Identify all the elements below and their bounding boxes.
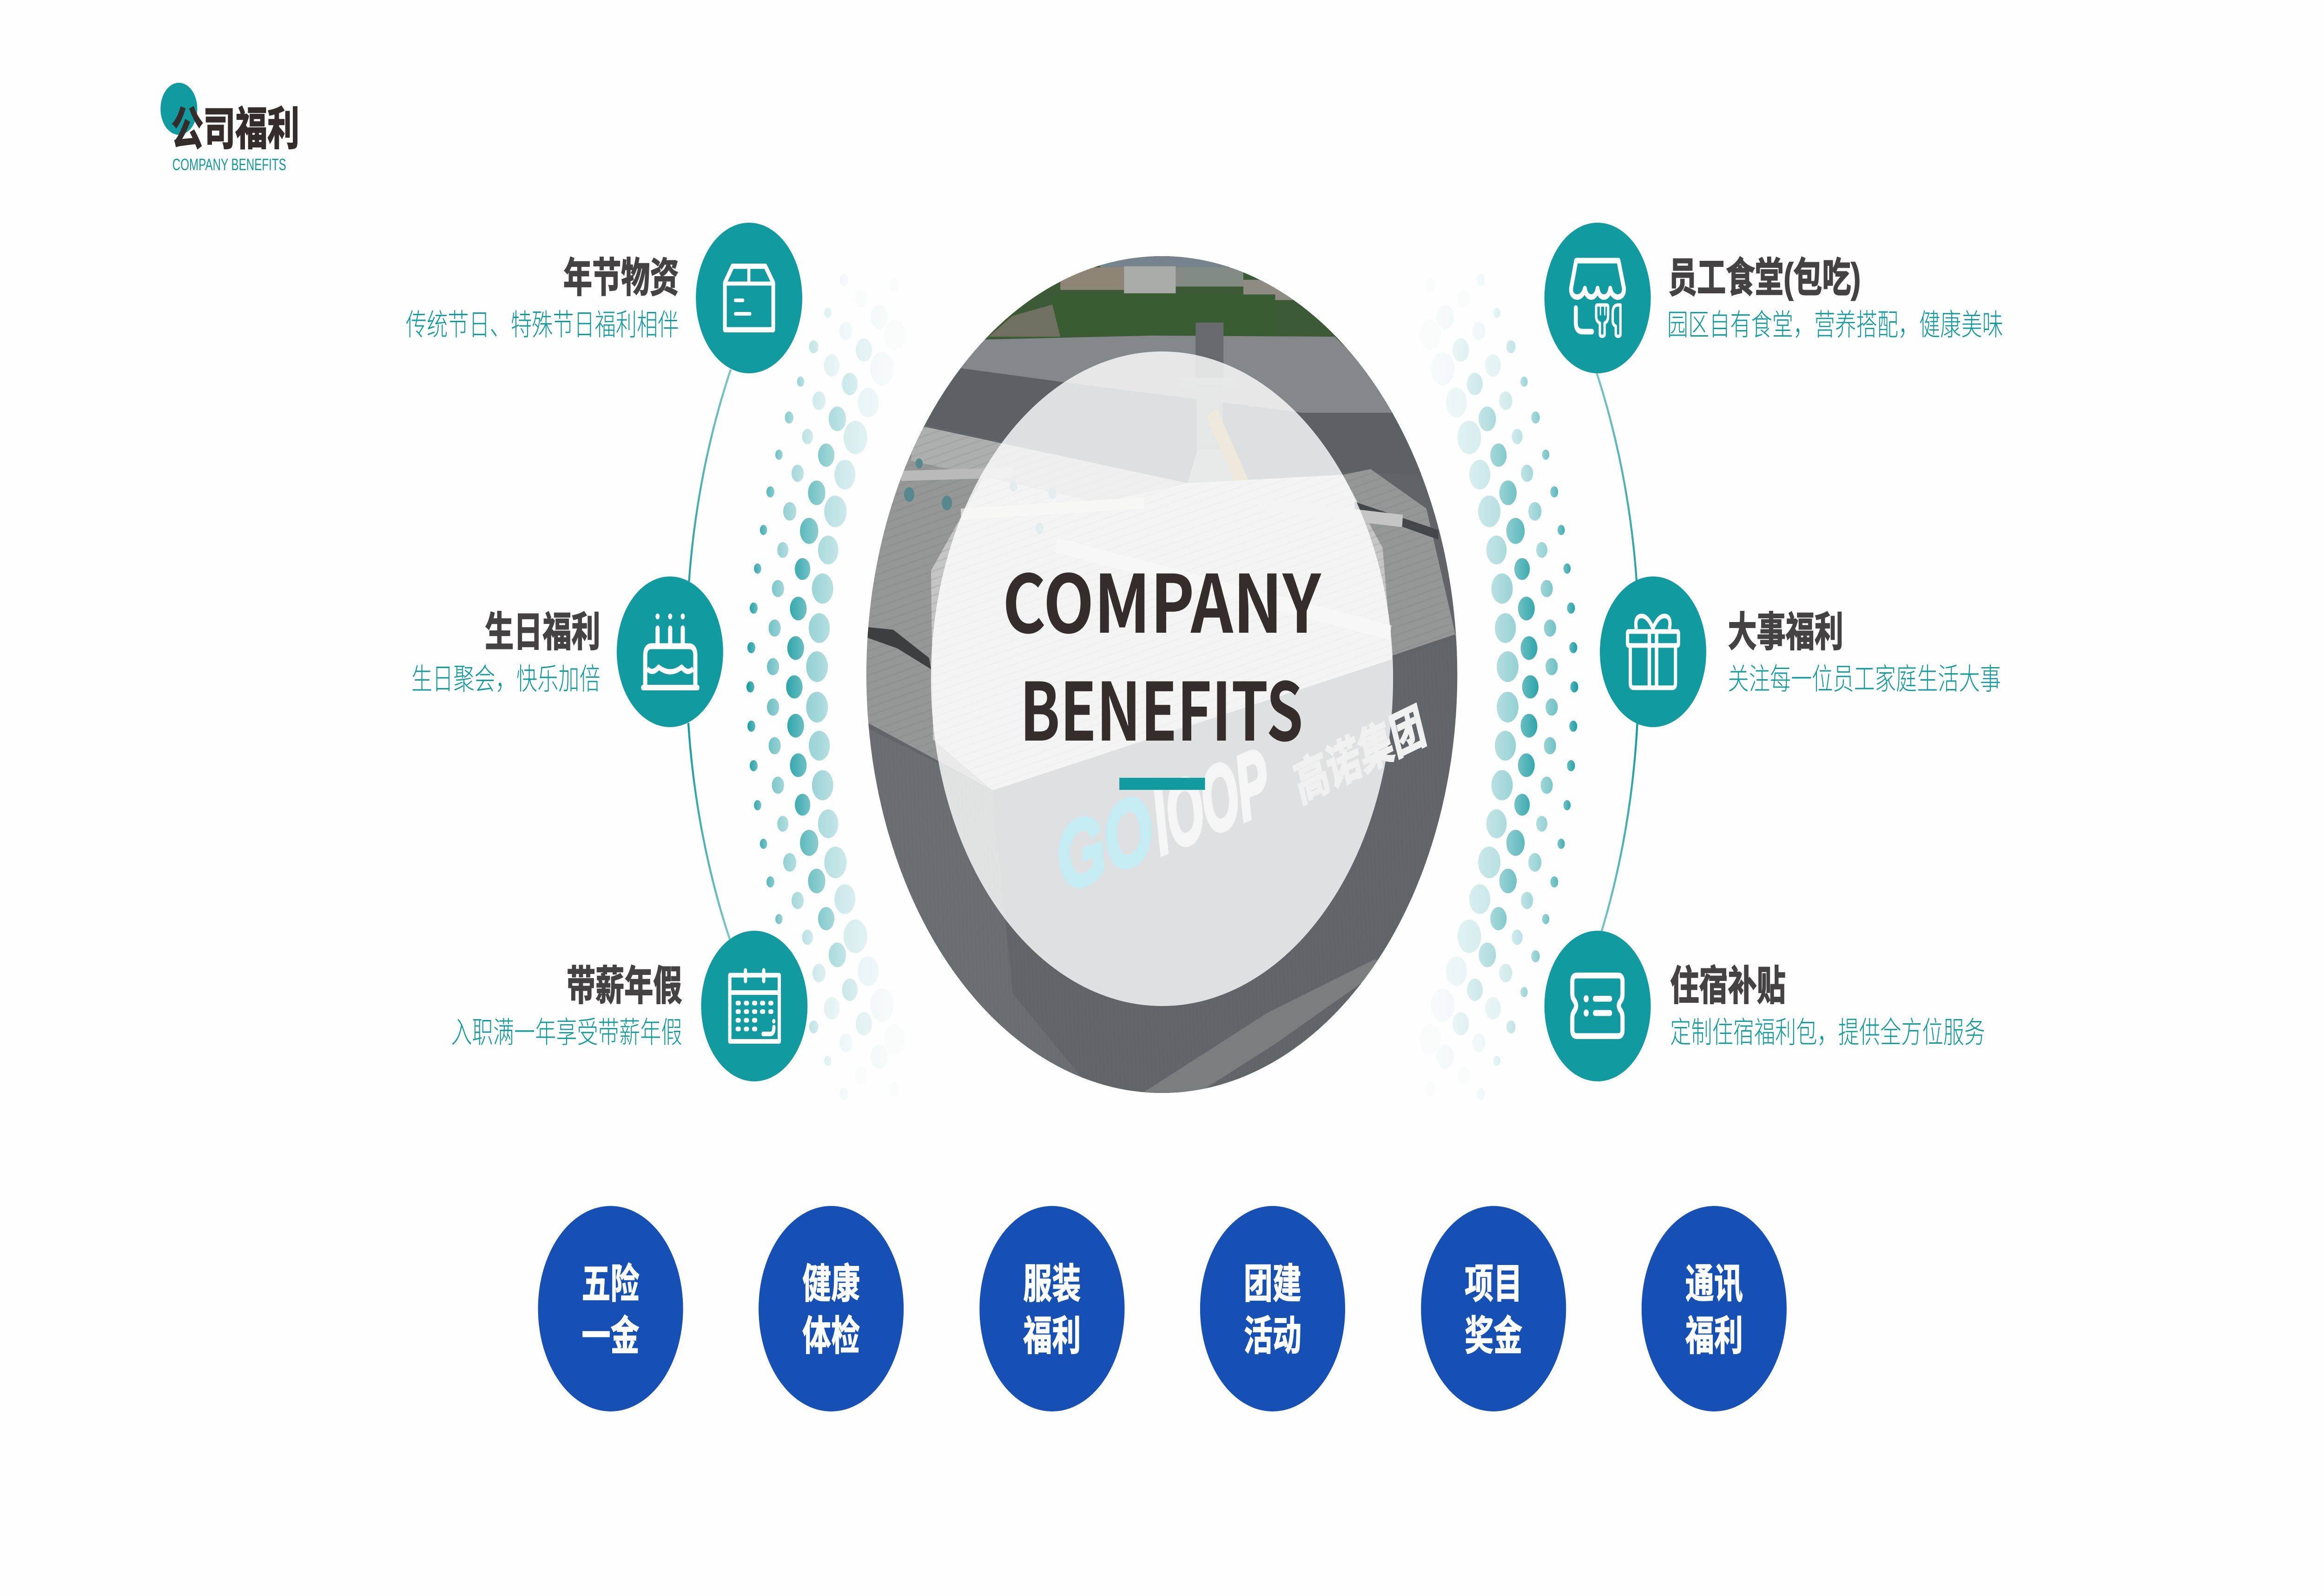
badge: 项目奖金 [1421, 1206, 1566, 1411]
badge: 五险一金 [538, 1206, 683, 1411]
badge: 健康体检 [759, 1206, 904, 1411]
title: 大事福利 [1728, 609, 1843, 656]
title: 生日福利 [485, 609, 601, 656]
description: 传统节日、特殊节日福利相伴 [406, 301, 679, 344]
badge: 项目奖金: 项目 [1465, 1261, 1522, 1307]
icon: canteen [1571, 261, 1624, 336]
heading Chinese title: 公司福利 [172, 103, 299, 154]
badge: 服装福利: 福利 [1023, 1313, 1081, 1359]
benefit: 带薪年假 [451, 931, 807, 1081]
benefit: 大事福利 [1600, 576, 2001, 727]
badge: 团建活动 [1200, 1206, 1345, 1411]
dot lower half [747, 692, 905, 1100]
badge: 团建活动: 团建 [1244, 1261, 1301, 1307]
benefit: 住宿补贴 [1545, 931, 1985, 1081]
badge: 通讯福利: 通讯 [1685, 1261, 1743, 1307]
building sign in photo: 高诺集团 [1289, 698, 1430, 813]
inner translucent circle [931, 351, 1393, 1006]
icon: calendar [730, 970, 779, 1041]
central title accent bar [1119, 778, 1205, 790]
badge: 团建活动: 活动 [1244, 1313, 1301, 1359]
badge: 五险一金: 一金 [581, 1313, 640, 1359]
heading accent circle [160, 83, 197, 135]
badge: 通讯福利: 福利 [1685, 1313, 1743, 1359]
description: 生日聚会，快乐加倍 [411, 655, 601, 698]
description: 定制住宿福利包，提供全方位服务 [1670, 1008, 1985, 1051]
dot halftone: left arc [746, 274, 905, 1100]
badge: 项目奖金: 奖金 [1465, 1313, 1522, 1359]
central photo circle [866, 256, 1458, 1093]
badge: 健康体检: 健康 [802, 1261, 860, 1307]
badge: 五险一金: 五险 [581, 1261, 640, 1307]
badge: 健康体检: 体检 [802, 1313, 860, 1359]
description: 关注每一位员工家庭生活大事 [1728, 655, 2001, 698]
heading: company benefits logo title [160, 83, 299, 174]
building sign in photo: lOOP [1144, 728, 1277, 874]
central title line 2: BENEFITS [1020, 648, 1303, 764]
badge: 服装福利: 服装 [1023, 1261, 1081, 1307]
dot halftone: right arc [1419, 274, 1578, 1100]
icon: birthday cake [643, 614, 698, 688]
title: 员工食堂(包吃) [1668, 255, 1861, 301]
icon: ticket [1572, 975, 1623, 1036]
title: 带薪年假 [567, 963, 682, 1009]
description: 入职满一年享受带薪年假 [451, 1008, 682, 1051]
badge: 通讯福利 [1642, 1206, 1787, 1411]
dot upper half [747, 274, 905, 682]
building sign in photo: GO [1047, 774, 1161, 912]
badge: 服装福利 [979, 1206, 1124, 1411]
building sign in photo [1047, 698, 1430, 912]
benefit: 生日福利 [411, 576, 723, 727]
description: 园区自有食堂，营养搭配，健康美味 [1667, 301, 2003, 344]
dot center row [746, 675, 803, 698]
central title [1003, 540, 1321, 790]
icon: box [725, 266, 773, 330]
connector arc: left [688, 370, 731, 939]
connector arc: right [1596, 370, 1637, 939]
heading English subtitle: COMPANY BENEFITS [172, 156, 286, 174]
benefit: 年节物资 [406, 223, 802, 373]
icon: gift [1628, 616, 1678, 688]
title: 年节物资 [563, 255, 679, 301]
title: 住宿补贴 [1670, 963, 1786, 1009]
central title line 1: COMPANY [1003, 540, 1321, 656]
benefit: 员工食堂 [1545, 223, 2003, 373]
